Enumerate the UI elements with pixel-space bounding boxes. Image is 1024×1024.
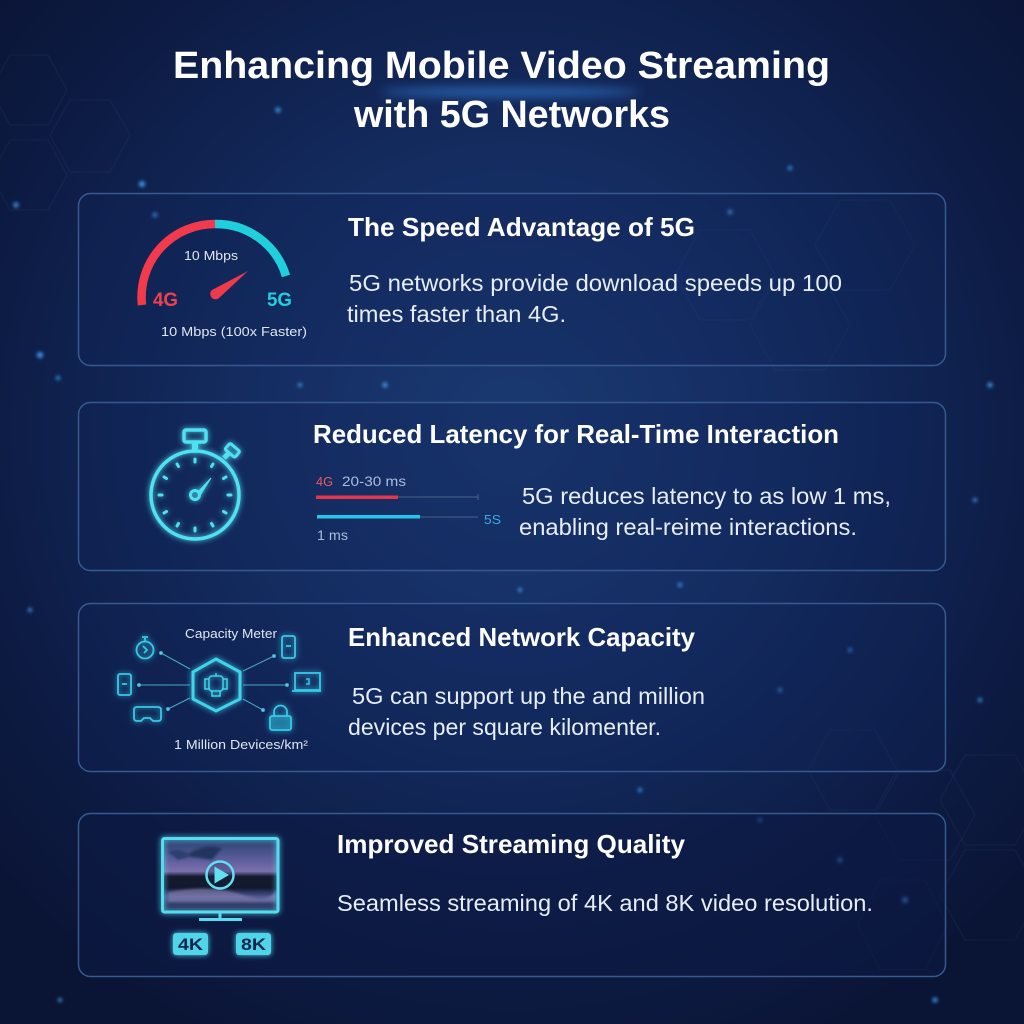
speedometer gauge: 5G xyxy=(267,290,292,311)
panel: latency xyxy=(78,402,946,570)
landscape detail xyxy=(168,846,276,902)
icon: stopwatch xyxy=(151,430,240,539)
text: speed description: 5G networks provide download speeds up 100 xyxy=(349,270,842,296)
latency comparison bars: 4G xyxy=(316,474,333,489)
speedometer gauge xyxy=(142,224,307,339)
badge: 8K: 8K xyxy=(241,935,267,954)
panel: capacity xyxy=(78,604,946,772)
heading: capacity: Enhanced Network Capacity xyxy=(348,622,696,652)
connector lines xyxy=(138,652,288,712)
text: latency description xyxy=(519,483,891,540)
title: Enhancing Mobile Video Streaming xyxy=(173,45,830,87)
speedometer gauge: 4G xyxy=(153,290,178,311)
text: speed description xyxy=(347,270,842,327)
network hub diagram: Capacity Meter xyxy=(185,627,277,641)
heading: speed: The Speed Advantage of 5G xyxy=(348,212,695,242)
heading: latency: Reduced Latency for Real-Time Interaction xyxy=(313,419,839,449)
text: latency description: 5G reduces latency to as low 1 ms, xyxy=(522,483,891,509)
device icons xyxy=(118,636,321,730)
panel: streaming quality xyxy=(78,814,946,976)
latency comparison bars xyxy=(316,473,501,543)
text: capacity description xyxy=(348,683,705,740)
badge: 4K xyxy=(173,933,208,955)
central hexagon hub xyxy=(193,659,240,711)
text: streaming description: Seamless streaming of 4K and 8K video resolution. xyxy=(337,890,873,916)
speedometer gauge: 10 Mbps (100x Faster) xyxy=(161,324,307,339)
network hub diagram: 1 Million Devices/km² xyxy=(174,737,309,752)
text: latency description: enabling real-reime interactions. xyxy=(519,514,857,540)
speedometer gauge: 10 Mbps xyxy=(184,248,239,263)
latency comparison bars: 1 ms xyxy=(317,527,348,543)
latency comparison bars: 5S xyxy=(484,512,501,527)
text: speed description: times faster than 4G. xyxy=(347,301,566,327)
text: capacity description: 5G can support up the and million xyxy=(352,683,705,709)
badge: 8K xyxy=(236,933,271,955)
title xyxy=(173,45,830,136)
icon: monitor with play xyxy=(162,838,278,920)
text: capacity description: devices per square kilomenter. xyxy=(348,714,661,740)
panel: speed advantage xyxy=(78,194,946,366)
network hub diagram xyxy=(118,627,321,752)
latency comparison bars: 20-30 ms xyxy=(342,473,406,489)
title: with 5G Networks xyxy=(353,94,670,136)
badge: 4K: 4K xyxy=(178,935,204,954)
heading: streaming: Improved Streaming Quality xyxy=(337,829,686,859)
